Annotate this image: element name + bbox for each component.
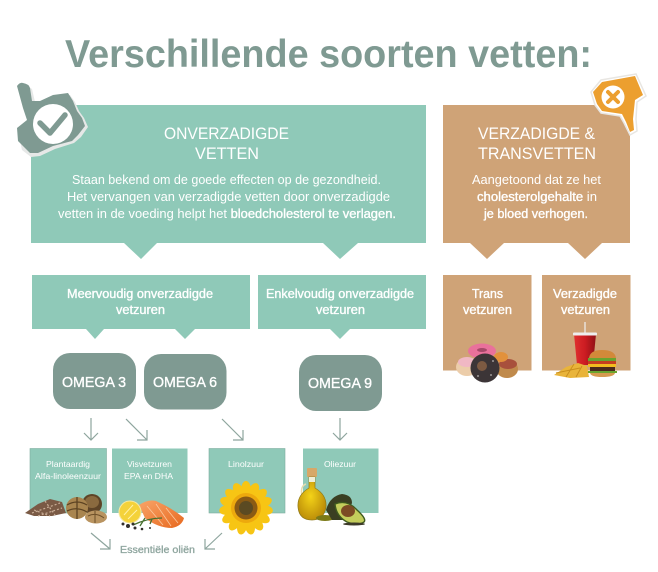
heading: verzadigde en transvetten [478, 124, 596, 163]
icon: fast food [554, 322, 617, 378]
text block: verzadigde en transvetten: Aangetoond dat ze het [472, 173, 602, 187]
text block: verzadigde en transvetten: je bloed verhogen. [483, 207, 588, 221]
label: meervoudig [67, 287, 213, 317]
label: essentiele olien: Essentiële oliën [120, 545, 195, 556]
box: linolzuur [209, 448, 285, 535]
label: plantaardig: Alfa-linoleenzuur [35, 471, 101, 481]
arrow: linolzuur to essentiele olien [205, 533, 222, 549]
panel: onverzadigde vetten [31, 105, 426, 259]
omega 6 badge: OMEGA 6 [153, 375, 217, 391]
icon: salmon and lemon [119, 500, 184, 530]
icon: thumbs down with cross [591, 74, 646, 135]
icon: donuts [456, 344, 518, 382]
arrow: omega 6 to linolzuur [222, 419, 243, 440]
panel: verzadigde en transvetten [443, 105, 630, 259]
icon: thumbs up with check [17, 83, 88, 157]
label: visvetzuren: Visvetzuren [127, 459, 172, 469]
label: plantaardig: Plantaardig [46, 459, 90, 469]
label: enkelvoudig: vetzuren [316, 303, 365, 317]
text block: onverzadigde vetten [58, 173, 396, 221]
label: trans vetzuren: Trans [472, 287, 503, 301]
heading: verzadigde en transvetten: VERZADIGDE & [478, 124, 596, 143]
label: trans vetzuren: vetzuren [463, 303, 512, 317]
omega 6 badge [144, 354, 226, 410]
label: enkelvoudig [266, 287, 414, 317]
label: meervoudig: vetzuren [116, 303, 165, 317]
box: visvetzuren EPA en DHA [112, 448, 188, 530]
icon: seeds and walnuts [25, 494, 107, 524]
heading: verzadigde en transvetten: TRANSVETTEN [478, 144, 596, 163]
heading: onverzadigde vetten: ONVERZADIGDE [164, 124, 289, 143]
icon: sunflower [219, 481, 273, 535]
omega 3 badge: OMEGA 3 [62, 375, 126, 391]
label: oliezuur: Oliezuur [324, 459, 356, 469]
text block: verzadigde en transvetten [472, 173, 602, 221]
omega 9 badge [299, 355, 382, 411]
arrow: omega 9 to oliezuur [333, 418, 347, 440]
panel: enkelvoudig onverzadigde vetzuren [258, 275, 426, 339]
label: trans vetzuren [463, 287, 512, 317]
label: meervoudig: Meervoudig onverzadigde [67, 287, 213, 301]
label: verzadigde vetzuren [553, 287, 617, 317]
label: plantaardig [35, 459, 101, 481]
omega 9 badge: OMEGA 9 [308, 376, 372, 392]
heading: onverzadigde vetten: VETTEN [195, 144, 259, 163]
text block: verzadigde en transvetten: cholesterolgehalte in [477, 190, 597, 204]
panel: verzadigde vetzuren [542, 275, 630, 378]
label: verzadigde vetzuren: vetzuren [561, 303, 610, 317]
text block: onverzadigde vetten: vetten in de voeding helpt het bloedcholesterol te verlagen. [58, 207, 396, 221]
panel: meervoudig onverzadigde vetzuren [32, 275, 250, 339]
title: Verschillende soorten vetten: [65, 33, 592, 76]
arrow: omega 3 to plantaardig [84, 418, 98, 440]
icon: olive oil and avocado [298, 468, 365, 526]
box: plantaardig alfa-linoleenzuur [25, 448, 107, 524]
label: visvetzuren: EPA en DHA [124, 471, 173, 481]
omega 3 badge [53, 353, 136, 409]
text block: onverzadigde vetten: Het vervangen van verzadigde vetten door onverzadigde [67, 190, 390, 204]
label: enkelvoudig: Enkelvoudig onverzadigde [266, 287, 414, 301]
heading: onverzadigde vetten [164, 124, 289, 163]
label: linolzuur: Linolzuur [228, 459, 264, 469]
arrow: omega 3 to visvetzuren [126, 419, 147, 440]
arrow: plantaardig to essentiele olien [91, 533, 110, 549]
panel: trans vetzuren [443, 275, 532, 382]
box: oliezuur [298, 448, 378, 526]
label: verzadigde vetzuren: Verzadigde [553, 287, 617, 301]
text block: onverzadigde vetten: Staan bekend om de goede effecten op de gezondheid. [72, 173, 381, 187]
label: visvetzuren [124, 459, 173, 481]
